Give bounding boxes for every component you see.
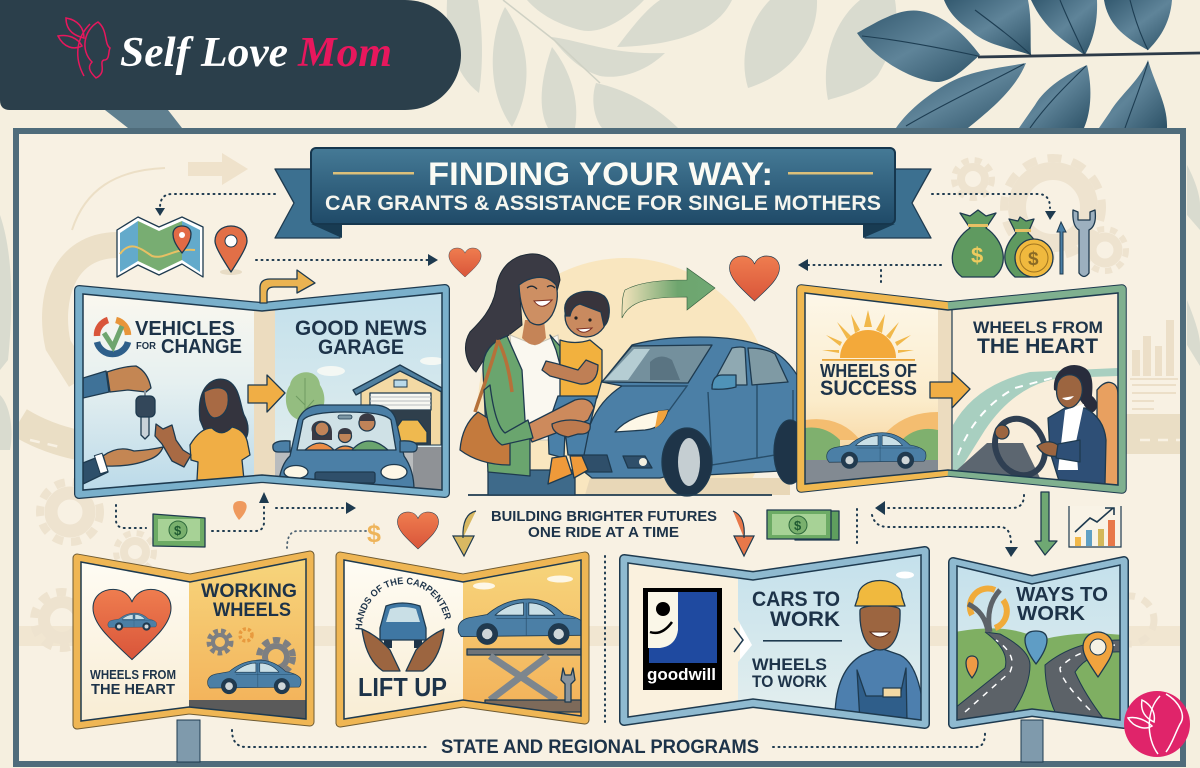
decorative faded leaves bbox=[447, 0, 896, 128]
label: Good News: GOOD NEWS bbox=[295, 317, 427, 340]
label: Lift Up: LIFT UP bbox=[358, 672, 447, 702]
label: Success: SUCCESS bbox=[820, 377, 917, 400]
bag strap bbox=[475, 340, 512, 412]
panel frame bbox=[79, 289, 445, 494]
clouds bbox=[317, 366, 345, 376]
arrow: gold turn bbox=[260, 270, 315, 303]
logo: Goodwill bbox=[643, 588, 722, 690]
icon: small pin bbox=[233, 501, 247, 520]
legs bbox=[548, 396, 597, 458]
decorative dark watercolour branch bbox=[857, 0, 1200, 128]
caption line one: BUILDING BRIGHTER FUTURES bbox=[491, 508, 717, 525]
coin dollar: $ bbox=[1028, 249, 1039, 270]
road: lower band bbox=[19, 626, 1180, 646]
green arrow bbox=[622, 268, 715, 318]
windshield bbox=[602, 345, 712, 383]
divider bbox=[763, 640, 842, 642]
label: Change: CHANGE bbox=[161, 336, 242, 358]
road bbox=[953, 368, 1118, 473]
panel art bbox=[955, 560, 1123, 730]
icon: gold dollar: $ bbox=[367, 520, 381, 548]
label: The Heart: THE HEART bbox=[91, 681, 175, 698]
car bbox=[208, 660, 301, 694]
car on lift bbox=[458, 599, 585, 644]
orange arrow bbox=[248, 375, 285, 412]
top bbox=[510, 335, 566, 440]
label: Work: WORK bbox=[770, 608, 840, 631]
label: Hands of the Carpenter: HANDS OF THE CARPENTER bbox=[355, 577, 451, 630]
brand name accent: Mom bbox=[297, 30, 392, 76]
ground line bbox=[468, 494, 772, 496]
brand name: Self Love bbox=[120, 30, 288, 76]
gears bbox=[34, 158, 1154, 648]
panel art bbox=[344, 550, 585, 730]
logo: Vehicles for Change bbox=[97, 320, 128, 354]
ribbon folds bbox=[311, 224, 895, 238]
icon: dollar bills right: $ bbox=[794, 518, 802, 533]
road: upper-left curve bbox=[55, 245, 118, 380]
ghost bar chart bbox=[1130, 320, 1178, 410]
icon: heart lower bbox=[397, 512, 439, 549]
neck and face bbox=[522, 320, 546, 345]
driver jacket bbox=[1048, 408, 1106, 484]
tree bbox=[286, 372, 324, 420]
front wheel bbox=[662, 428, 712, 496]
label: Cars to: CARS TO bbox=[752, 588, 840, 611]
icon: orange dollar pin bbox=[966, 656, 978, 678]
signpost left bbox=[177, 720, 200, 762]
ribbon tail left bbox=[275, 169, 340, 238]
jeans bbox=[488, 470, 575, 495]
panel frame bbox=[340, 556, 585, 723]
caption bbox=[491, 508, 717, 541]
label: Wheels of: WHEELS OF bbox=[820, 361, 917, 381]
ground bbox=[275, 447, 413, 476]
hair bbox=[465, 254, 560, 372]
arrow: orange curved down bbox=[733, 511, 754, 556]
panel inner outline bbox=[628, 555, 921, 720]
rear wheel bbox=[774, 420, 806, 484]
caption line two: ONE RIDE AT A TIME bbox=[528, 524, 679, 541]
green side bbox=[948, 289, 1122, 489]
thin curve bbox=[72, 168, 165, 230]
icon: blue pin bbox=[1025, 631, 1047, 664]
garage bbox=[361, 368, 441, 445]
title banner bbox=[275, 148, 931, 238]
icon: cupping hands bbox=[362, 629, 444, 671]
icon: location pin bbox=[215, 226, 247, 275]
hills bbox=[805, 428, 938, 462]
fold line bbox=[951, 310, 953, 470]
label: Vehicles: VEHICLES bbox=[135, 318, 235, 340]
icon: road swirl bbox=[968, 589, 1007, 632]
road: left band bbox=[19, 422, 78, 445]
hair bbox=[565, 291, 609, 326]
shirt bbox=[560, 340, 602, 398]
ribbon tail right bbox=[865, 169, 931, 238]
illustration: mother, child and car bbox=[459, 253, 796, 497]
panel frame bbox=[953, 561, 1124, 724]
panel inner outline bbox=[81, 559, 306, 721]
panel inner outline bbox=[83, 293, 442, 490]
label: to Work: TO WORK bbox=[752, 672, 828, 691]
icon: money bags and coin bbox=[952, 210, 1053, 277]
steering wheel bbox=[992, 416, 1048, 476]
icon: heart with car bbox=[93, 589, 171, 660]
dashboard bbox=[957, 443, 1040, 478]
sun glow bbox=[478, 258, 758, 494]
header pill bbox=[0, 0, 461, 110]
arrow: green down bbox=[1035, 492, 1057, 555]
bag front bbox=[952, 210, 1003, 277]
label: Wheels: WHEELS bbox=[752, 655, 827, 674]
bag dollar: $ bbox=[971, 243, 983, 268]
icon: pink lotus face logo bbox=[58, 18, 110, 78]
coin bbox=[1015, 239, 1053, 277]
headlight bbox=[615, 410, 668, 432]
panel frame bbox=[624, 551, 925, 724]
footer label: STATE AND REGIONAL PROGRAMS bbox=[441, 737, 759, 758]
gears bbox=[209, 629, 293, 674]
panel frame bbox=[77, 555, 310, 725]
side windows bbox=[712, 347, 747, 385]
panel inner outline bbox=[805, 293, 1118, 485]
shoes bbox=[548, 456, 588, 484]
signpost right bbox=[1021, 720, 1043, 762]
icon: dollar bills right bbox=[767, 510, 839, 540]
icon: growth chart bbox=[1069, 506, 1121, 547]
woman receiving key bbox=[199, 379, 248, 438]
subtitle: CAR GRANTS & ASSISTANCE FOR SINGLE MOTHERS bbox=[325, 192, 881, 215]
child bbox=[542, 291, 609, 484]
driver face bbox=[1057, 375, 1082, 408]
faded arrow bbox=[188, 153, 248, 185]
worker bbox=[835, 648, 925, 725]
family car front view bbox=[278, 405, 414, 490]
car bbox=[827, 433, 926, 468]
panel: Wheels from the Heart and Working Wheels bbox=[77, 550, 310, 730]
panel: Vehicles for Change and Good News Garage bbox=[79, 289, 445, 495]
panel inner outline bbox=[957, 565, 1120, 720]
dotted connectors bbox=[116, 194, 1056, 747]
chevron bbox=[734, 628, 743, 652]
car bbox=[581, 337, 806, 496]
label: Wheels from: WHEELS FROM bbox=[973, 318, 1103, 337]
panel: Wheels of Success and Wheels from the Heart bbox=[801, 289, 1122, 490]
driver hair bbox=[1054, 365, 1097, 413]
heart bbox=[730, 256, 780, 301]
panel: Ways to Work bbox=[953, 560, 1124, 730]
panel inner outline bbox=[344, 560, 581, 719]
label: Working: WORKING bbox=[201, 580, 297, 602]
cardigan bbox=[483, 336, 530, 476]
gold side bbox=[801, 289, 948, 488]
icon: folded map bbox=[117, 217, 203, 277]
mother bbox=[460, 254, 575, 495]
decorative leaf under header bbox=[105, 110, 182, 128]
label: Garage: GARAGE bbox=[318, 336, 404, 359]
decorative side leaves bbox=[0, 165, 1200, 450]
wrench bbox=[561, 668, 575, 702]
grille and fog lamp bbox=[582, 455, 612, 472]
panel: Hands of the Carpenter and Lift Up bbox=[336, 552, 590, 728]
mother's arms bbox=[484, 385, 594, 445]
driver shirt bbox=[1058, 404, 1084, 470]
icon: wrench and arrow bbox=[1057, 210, 1095, 276]
car body bbox=[581, 337, 800, 478]
label: Wheels: WHEELS bbox=[213, 599, 291, 621]
sleeve and hand with key bbox=[83, 371, 109, 398]
body lines bbox=[622, 385, 793, 465]
panel art bbox=[628, 550, 925, 730]
head bbox=[565, 295, 607, 337]
icon: heart top-left bbox=[449, 248, 481, 277]
seat bbox=[1097, 382, 1118, 490]
banner plate bbox=[311, 148, 895, 224]
badge: brand mark bbox=[1124, 691, 1190, 757]
key bbox=[144, 390, 146, 396]
scissor lift bbox=[467, 649, 583, 655]
panel: Goodwill Cars to Work and Wheels to Work bbox=[624, 550, 925, 730]
bag back bbox=[1005, 217, 1040, 277]
lower hand bbox=[103, 447, 163, 466]
mirror bbox=[712, 375, 736, 389]
sun rays low bbox=[805, 412, 938, 440]
icon: sunrise bbox=[822, 310, 915, 361]
label: Ways to: WAYS TO bbox=[1016, 584, 1108, 606]
gold rule left bbox=[333, 172, 414, 174]
title: FINDING YOUR WAY: bbox=[428, 156, 773, 192]
family in car bbox=[312, 421, 332, 440]
arrow: gold curved down bbox=[453, 511, 476, 556]
label: for: FOR bbox=[136, 341, 157, 352]
driver hands bbox=[995, 425, 1009, 439]
goodwill wordmark: goodwill bbox=[647, 665, 716, 684]
icon: dollar bill left: $ bbox=[174, 523, 182, 538]
label: Wheels from: WHEELS FROM bbox=[90, 668, 176, 682]
road: right band bbox=[1126, 414, 1180, 454]
ground shadow bbox=[585, 478, 790, 495]
icon: car front bbox=[380, 603, 426, 648]
background roads, gears and ghost icons bbox=[19, 153, 1180, 648]
bag bbox=[460, 412, 510, 465]
seats bbox=[650, 356, 680, 380]
icon: dollar bill left bbox=[153, 514, 205, 547]
label: The Heart: THE HEART bbox=[977, 335, 1098, 358]
gold rule right bbox=[788, 172, 873, 174]
panel art bbox=[805, 290, 1120, 490]
icon: orange pin bbox=[1083, 632, 1113, 677]
clouds bbox=[473, 582, 495, 590]
panel art bbox=[83, 290, 444, 495]
label: Work: WORK bbox=[1017, 603, 1086, 625]
header bar bbox=[0, 0, 461, 110]
gold arrow bbox=[930, 372, 970, 408]
arm bbox=[542, 360, 598, 384]
panel art bbox=[81, 550, 309, 730]
panel frame bbox=[801, 289, 1122, 489]
